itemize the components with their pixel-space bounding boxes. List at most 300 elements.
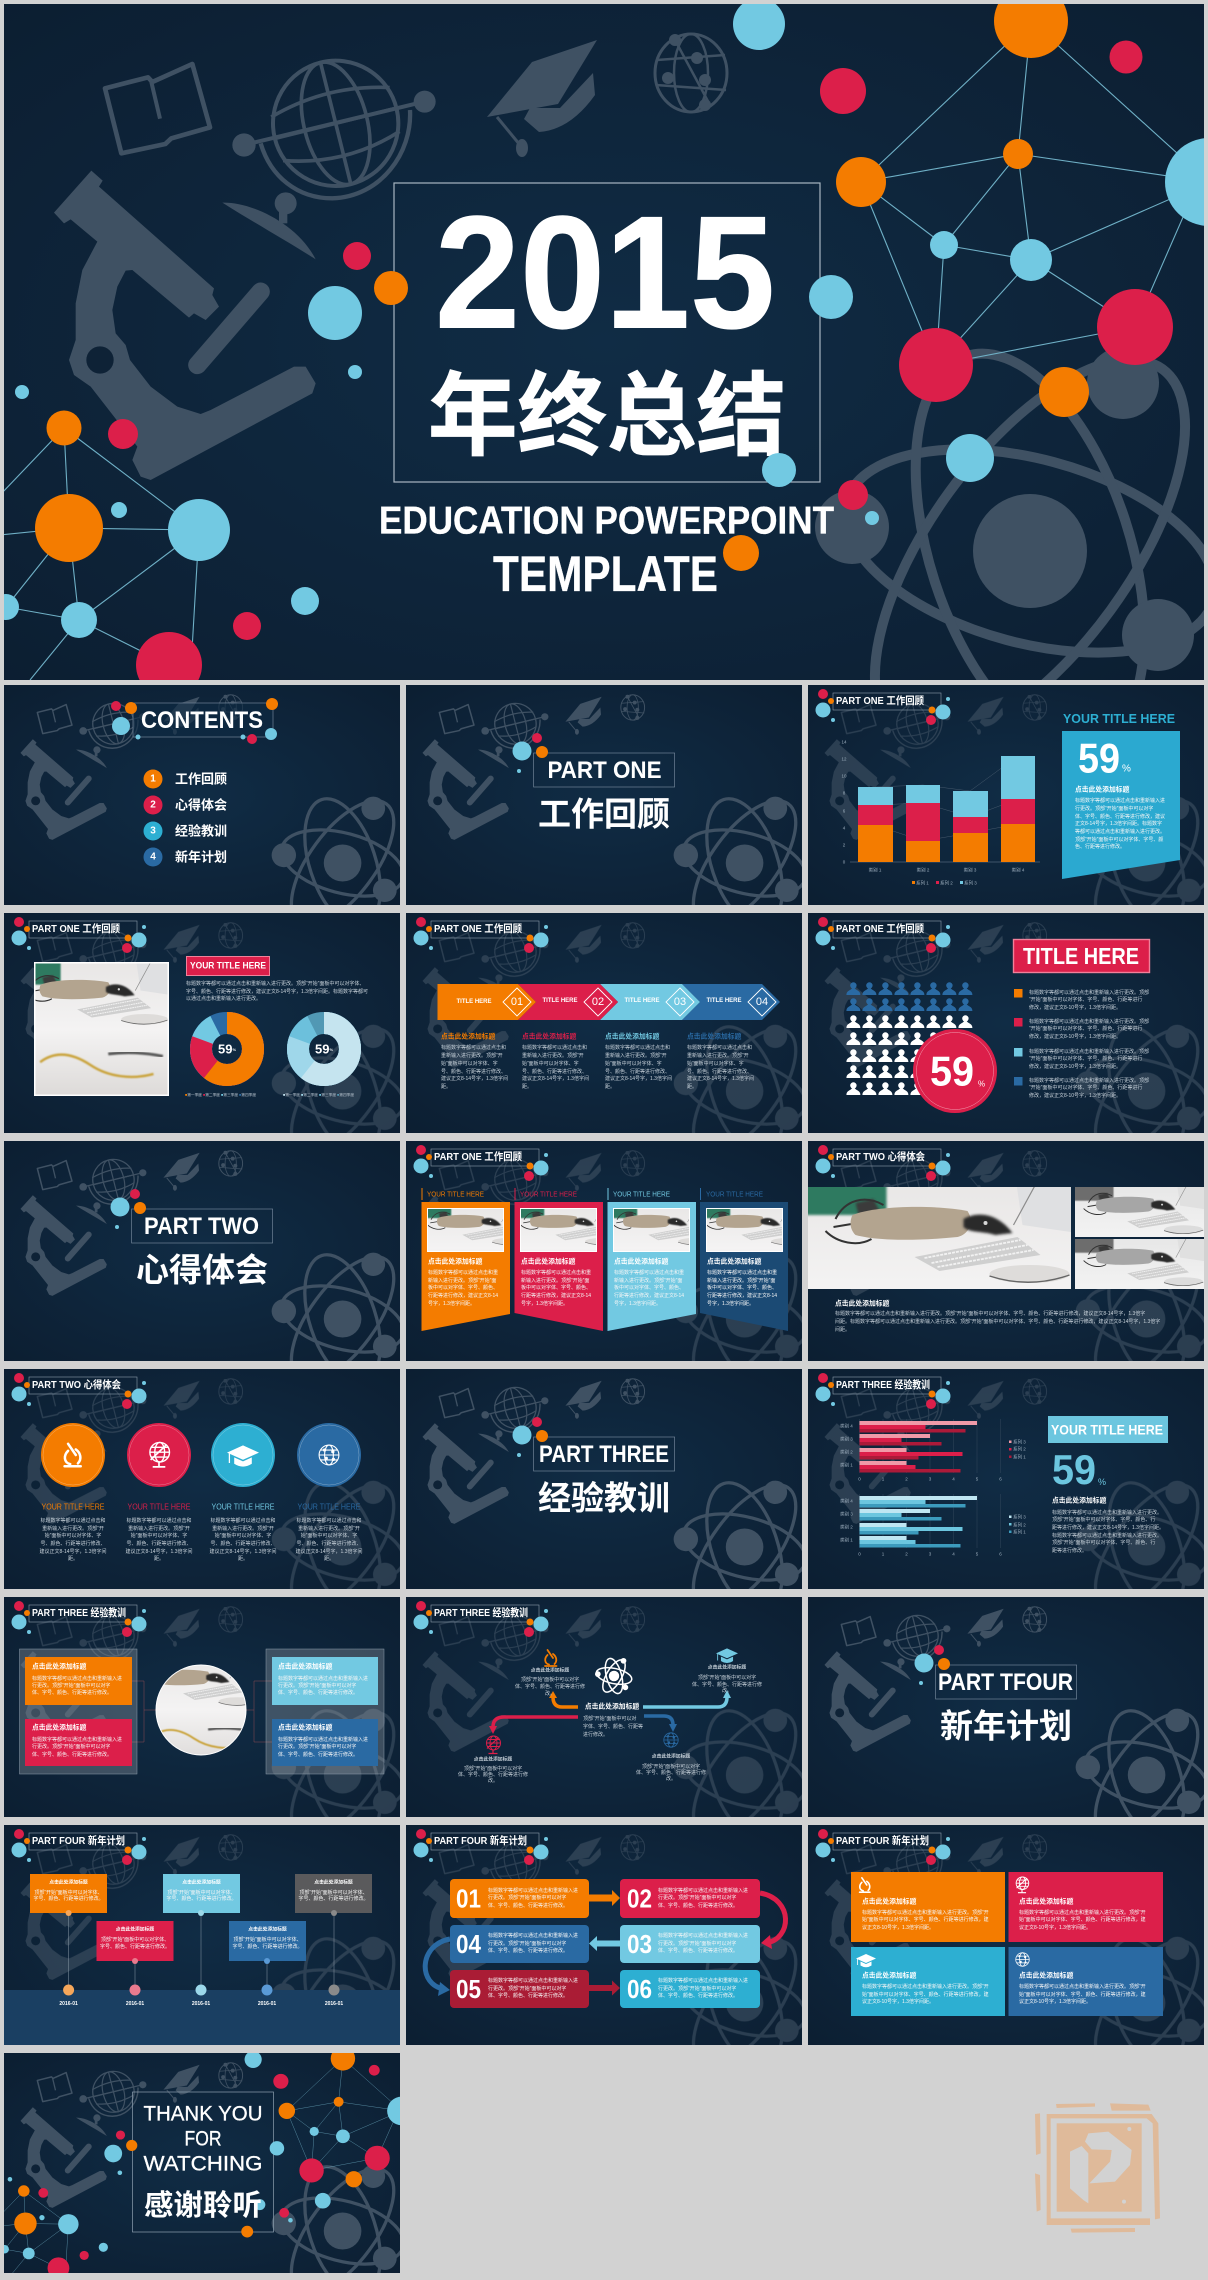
right title: YOUR TITLE HERE: [1063, 712, 1175, 726]
right panel: 标题数字等都可以通过点击和重新输入进: [278, 1736, 368, 1743]
item 2: 号、颜色、行距等进行修改、: [126, 1540, 192, 1547]
slide: cover: [4, 4, 1204, 680]
item 2: 标题数字等都可以通过点击和: [126, 1517, 192, 1524]
stacked bar chart: 2: [843, 842, 846, 848]
side text: 顶部“开始”面板中可以对字体、字号、颜色、行: [1052, 1539, 1155, 1546]
header text: PART THREE 经验教训: [836, 1378, 930, 1391]
background icons: [824, 695, 1208, 941]
card 4: YOUR TITLE HERE: [706, 1190, 763, 1198]
step 06: 体、字号、颜色、行距等进行修改。: [658, 1992, 738, 1999]
connector lines: [132, 1681, 272, 1742]
card 3: 点击此处添加标题: [614, 1256, 669, 1266]
contents list: 工作回顾: [175, 772, 227, 786]
header badge: [12, 1829, 146, 1865]
column 3: 始”面板中可以对字体、字: [605, 1060, 662, 1067]
card 2: 标题数字等都可以通过点击和重: [521, 1269, 591, 1276]
title box: [1048, 1416, 1168, 1443]
caption: 间距。标题数字等都可以通过点击和重新输入进行更改。顶部“开始”面板中可以对字体、字号、颜色、行距等进行修改，建议正文8-14号字，1.3倍字: [835, 1318, 1160, 1325]
side text: [1052, 1496, 1164, 1554]
left panel: 体、字号、颜色、行距等进行修改。: [32, 1751, 112, 1758]
item 4: YOUR TITLE HERE: [298, 1502, 360, 1512]
bullet list: “开始”面板中可以对字体、字号、颜色、行距等进行: [1029, 1055, 1142, 1062]
center text: 顶部“开始”面板中可以对: [583, 1715, 636, 1722]
item 4: 距。: [324, 1556, 334, 1562]
branch: light blue: 点击此处添加标题: [708, 1664, 746, 1670]
left panel: [20, 1649, 137, 1774]
timeline band: [4, 1990, 400, 2045]
branch: orange: 体、字号、颜色、行距等进行修: [515, 1683, 585, 1690]
step 01: 体、字号、颜色、行距等进行修改。: [488, 1902, 568, 1909]
item 1: 始”面板中可以对字体、字: [45, 1532, 101, 1539]
body text: 字号、颜色、行距等进行修改，建议正文8-14号字，1.3倍字间距。标题数字等都可: [186, 988, 368, 995]
item 3: 距。: [238, 1556, 248, 1562]
red bar chart: 3: [929, 1476, 932, 1482]
header text: PART ONE 工作回顾: [836, 922, 924, 935]
tile 2: [1008, 1872, 1163, 1942]
title box: TITLE HERE: [1023, 943, 1139, 969]
section title: PART TWO: [144, 1213, 259, 1240]
red bar chart: 类别 4: [840, 1422, 853, 1430]
card 1: 标题数字等都可以通过点击和重: [428, 1269, 498, 1276]
blue bar chart: 类别 4: [840, 1498, 853, 1504]
section frame and dots: [914, 1645, 1077, 1699]
card 3: 板中可以对字体、字号、颜色、: [614, 1284, 684, 1291]
column 1: 始”面板中可以对字体、字: [441, 1060, 498, 1067]
column 3: [605, 1032, 672, 1090]
contents list: 3: [150, 826, 156, 836]
column 4: 标题数字等都可以通过点击和: [687, 1044, 752, 1051]
card 4: 点击此处添加标题: [707, 1256, 762, 1266]
right panel: 行更改。顶部“开始”面板中可以对字: [278, 1743, 356, 1750]
item 3: 号、颜色、行距等进行修改、: [210, 1540, 276, 1547]
branch: red: 改。: [488, 1777, 498, 1784]
milestone 1: [30, 1874, 107, 2007]
tile 4: 议正文8-10号字，1.3倍字间距。: [1019, 1998, 1091, 2005]
step 05: 行更改。顶部“开始”面板中可以对字: [488, 1985, 566, 1992]
stacked bar chart: 系列 3: [964, 880, 977, 886]
right panel: 标题数字等都可以通过点击和重新输入进: [278, 1675, 368, 1682]
column 3: 重新输入进行更改。顶部“开: [605, 1052, 667, 1059]
59 percent circle: %: [978, 1080, 985, 1088]
slide: part four section: [808, 1597, 1204, 1817]
step 06: 06: [627, 1974, 652, 2004]
tile 4: 始”面板中可以对字体、字号、颜色、行距等进行修改，建: [1019, 1991, 1146, 1998]
milestone 4: 顶部“开始”面板中可以对字体、: [233, 1936, 302, 1943]
card 4: 板中可以对字体、字号、颜色、: [707, 1284, 777, 1291]
item 2: 重新输入进行更改。顶部“开: [128, 1525, 190, 1532]
side text: 顶部“开始”面板中可以对字体、字号、颜色、行: [1052, 1516, 1155, 1523]
callout panel: 标题数字等都可以通过点击和重新输入进: [1075, 797, 1165, 804]
chevron row: 04: [756, 996, 768, 1008]
step 03: 体、字号、颜色、行距等进行修改。: [658, 1947, 738, 1954]
item 2: 距。: [154, 1556, 164, 1562]
stacked bar chart: 系列 1: [916, 880, 929, 886]
body text: [186, 980, 368, 1002]
card 1: 点击此处添加标题: [428, 1256, 483, 1266]
59 percent circle: 59: [930, 1048, 974, 1094]
item 4: 重新输入进行更改。顶部“开: [298, 1525, 360, 1532]
header badge: [414, 1829, 548, 1865]
step 06: [620, 1970, 760, 2008]
branch: orange: 改。: [545, 1690, 555, 1697]
background icons: [20, 695, 413, 941]
item 3: [210, 1423, 276, 1562]
red bar chart: [840, 1419, 1026, 1482]
thank you text: [144, 2102, 262, 2222]
card 2: 新输入进行更改。顶部“开始”面: [521, 1277, 589, 1284]
right panel: 点击此处添加标题: [278, 1662, 333, 1670]
small photo top: [1060, 1172, 1208, 1305]
branch: blue: 点击此处添加标题: [652, 1752, 690, 1760]
branch: red: 体、字号、颜色、行距等进行修: [458, 1771, 528, 1778]
item 2: YOUR TITLE HERE: [128, 1502, 190, 1512]
stacked bar chart: 6: [843, 808, 846, 814]
background icons: [20, 1835, 413, 2081]
timeline connectors: [69, 1913, 334, 1990]
branch: red: [458, 1736, 528, 1784]
milestone 3: 顶部“开始”面板中可以对字体、: [167, 1889, 236, 1896]
callout panel: 行更改。顶部“开始”面板中可以对字: [1075, 805, 1153, 812]
header text: PART ONE 工作回顾: [434, 1150, 522, 1163]
stacked bar chart: 0: [843, 860, 846, 864]
red bar chart: 1: [882, 1476, 885, 1482]
contents list: [144, 770, 227, 866]
section frame and dots: [110, 1189, 273, 1243]
background icons: [824, 1379, 1208, 1625]
header badge: [816, 917, 950, 953]
blue bar chart: 4: [952, 1552, 955, 1556]
tile 3: 标题数字等都可以通过点击和重新输入进行更改。顶部“开: [862, 1983, 989, 1990]
contents list: 新年计划: [175, 850, 227, 864]
slide: thank you: [4, 2053, 400, 2273]
column 2: 号、颜色、行距等进行修改、: [522, 1068, 587, 1075]
red bar chart: 类别 1: [840, 1462, 853, 1468]
item 3: 重新输入进行更改。顶部“开: [212, 1525, 274, 1532]
watermark stamp: [1035, 2103, 1160, 2233]
item 2: 建议正文8-14号字，1.3倍字间: [126, 1548, 192, 1555]
red bar chart: 2: [905, 1476, 908, 1482]
title pill: YOUR TITLE HERE: [190, 960, 266, 972]
column 2: [522, 1032, 589, 1090]
red bar chart: 6: [999, 1476, 1002, 1482]
header text: PART THREE 经验教训: [32, 1606, 126, 1619]
left panel: 点击此处添加标题: [32, 1722, 87, 1732]
blue bar chart: 类别 1: [840, 1536, 853, 1544]
bullet list: 修改，建议正文8-10号字，1.3倍字间距。: [1029, 1092, 1121, 1099]
card 1: YOUR TITLE HERE: [427, 1190, 484, 1198]
column 2: 距。: [522, 1084, 532, 1090]
big percentage: 59: [1052, 1446, 1096, 1493]
slide: contents: [4, 685, 400, 905]
milestone 2: 点击此处添加标题: [116, 1926, 154, 1932]
tile 2: 标题数字等都可以通过点击和重新输入进行更改。顶部“开: [1019, 1909, 1146, 1916]
chevron row: 02: [592, 996, 604, 1008]
large photo: [808, 1187, 1071, 1289]
column 2: 重新输入进行更改。顶部“开: [522, 1052, 584, 1059]
right panel: 点击此处添加标题: [278, 1722, 333, 1732]
red bar chart: 5: [976, 1476, 979, 1482]
red bar chart: 类别 2: [840, 1448, 853, 1456]
column 4: 号、颜色、行距等进行修改、: [687, 1068, 752, 1075]
chevron row: TITLE HERE: [706, 998, 742, 1004]
stacked bar chart: 10: [841, 774, 847, 778]
stacked bar chart: [841, 740, 1040, 886]
side text: 距等进行修改，建议正文8-14号字，1.3倍字间距。: [1052, 1524, 1164, 1531]
blue bar chart: 0: [858, 1552, 861, 1556]
slide: part three section: [406, 1369, 802, 1589]
red bar chart: 系列 3: [1013, 1438, 1026, 1446]
milestone 5: 2016-01: [325, 2001, 343, 2007]
center text: 字体、字号、颜色、行距等: [583, 1723, 643, 1730]
left panel: 标题数字等都可以通过点击和重新输入进: [32, 1736, 122, 1743]
item 4: 标题数字等都可以通过点击和: [296, 1517, 362, 1524]
chevron row: TITLE HERE: [624, 998, 660, 1004]
section title: PART TFOUR: [938, 1669, 1073, 1696]
contents heading: [111, 698, 278, 744]
step 02: 02: [627, 1884, 652, 1914]
tile 1: 议正文8-10号字，1.3倍字间距。: [862, 1924, 934, 1931]
item 4: 始”面板中可以对字体、字: [301, 1532, 357, 1539]
milestone 3: 2016-01: [192, 2001, 210, 2007]
column 3: 标题数字等都可以通过点击和: [605, 1044, 670, 1051]
bullet list: 标题数字等都可以通过点击和重新输入进行更改。顶部: [1029, 1048, 1149, 1055]
branch: red: 点击此处添加标题: [474, 1756, 512, 1762]
milestone 1: 顶部“开始”面板中可以对字体、: [34, 1889, 103, 1896]
column 1: 建议正文8-14号字，1.3倍字间: [441, 1075, 508, 1082]
stacked bar chart: 类别 4: [1012, 866, 1025, 874]
thank you text: 感谢聆听: [144, 2189, 262, 2222]
contents list: 2: [150, 800, 156, 810]
chevron row: [438, 984, 780, 1020]
right panel: 行更改。顶部“开始”面板中可以对字: [278, 1682, 356, 1689]
background icons: [422, 1835, 815, 2081]
bullet list: 标题数字等都可以通过点击和重新输入进行更改。顶部: [1029, 1077, 1149, 1084]
header badge: [816, 1373, 950, 1409]
tile 3: 始”面板中可以对字体、字号、颜色、行距等进行修改，建: [862, 1991, 989, 1998]
card 1: 号字，1.3倍字间距。: [428, 1300, 475, 1307]
right panel: 体、字号、颜色、行距等进行修改。: [278, 1689, 358, 1696]
arrow: 03 to 04: [589, 1936, 620, 1951]
step 04: 标题数字等都可以通过点击和重新输入进: [488, 1932, 578, 1939]
side text: 标题数字等都可以通过点击和重新输入进行更改。: [1052, 1509, 1162, 1516]
item 2: [126, 1423, 192, 1562]
card 3: [594, 1188, 725, 1331]
column 2: 始”面板中可以对字体、字: [522, 1060, 579, 1067]
card 3: 号字，1.3倍字间距。: [614, 1300, 661, 1307]
header badge: [12, 1373, 146, 1409]
card 3: YOUR TITLE HERE: [613, 1190, 670, 1198]
header badge: [414, 917, 548, 953]
item 1: 号、颜色、行距等进行修改、: [40, 1540, 106, 1547]
step 03: [620, 1925, 760, 1963]
step 03: 行更改。顶部“开始”面板中可以对字: [658, 1940, 736, 1947]
red bar chart: 类别 3: [840, 1436, 853, 1442]
photo: [0, 951, 190, 1109]
blue bar chart: 类别 3: [840, 1510, 853, 1518]
blue bar chart: 6: [999, 1552, 1002, 1556]
step 05: 体、字号、颜色、行距等进行修改。: [488, 1992, 568, 1999]
section chinese title: 心得体会: [136, 1252, 268, 1288]
header text: PART FOUR 新年计划: [32, 1834, 125, 1847]
blue bar chart: 系列 3: [1013, 1514, 1026, 1520]
caption: 标题数字等都可以通过点击和重新输入进行更改。顶部“开始”面板中可以对字体、字号、颜色、行距等进行修改，建议正文8-14号字，1.3倍字: [835, 1310, 1145, 1317]
header badge: [816, 1145, 950, 1181]
step 06: 行更改。顶部“开始”面板中可以对字: [658, 1985, 736, 1992]
side text: 点击此处添加标题: [1052, 1496, 1107, 1504]
chevron row: TITLE HERE: [542, 998, 578, 1004]
milestone 2: 字号、颜色、行距等进行修改。: [100, 1943, 170, 1950]
header text: PART THREE 经验教训: [434, 1606, 528, 1619]
milestone 1: 字号、颜色、行距等进行修改。: [33, 1895, 104, 1902]
milestone 2: 顶部“开始”面板中可以对字体、: [101, 1936, 169, 1943]
section frame and dots: [512, 1417, 675, 1471]
milestone 4: 2016-01: [258, 2001, 276, 2007]
card 4: 新输入进行更改。顶部“开始”面: [707, 1277, 775, 1284]
center text: 点击此处添加标题: [585, 1702, 639, 1710]
tile 1: [851, 1872, 1005, 1942]
item 4: 号、颜色、行距等进行修改、: [296, 1540, 362, 1547]
card 2: 号字，1.3倍字间距。: [521, 1300, 568, 1307]
center text: 进行修改。: [583, 1731, 608, 1738]
red bar chart: 0: [858, 1476, 861, 1482]
header text: PART ONE 工作回顾: [836, 694, 924, 707]
stacked bar chart: 类别 3: [964, 866, 977, 874]
molecule network dots: [0, 0, 1208, 698]
background icons: [422, 1607, 815, 1853]
tile 1: 始”面板中可以对字体、字号、颜色、行距等进行修改，建: [862, 1916, 989, 1923]
milestone 1: 2016-01: [59, 2001, 78, 2007]
big percentage: %: [1098, 1477, 1106, 1487]
slide: numbered flow: [8, 1825, 802, 2273]
column 3: 建议正文8-14号字，1.3倍字间: [605, 1075, 672, 1082]
header badge: [816, 1829, 950, 1865]
step 03: 标题数字等都可以通过点击和重新输入进: [658, 1932, 748, 1939]
bullet list: “开始”面板中可以对字体、字号、颜色、行距等进行: [1029, 1025, 1142, 1032]
item 3: YOUR TITLE HERE: [212, 1502, 274, 1512]
background education icons: [54, 34, 1208, 792]
slide: part one section: [406, 685, 802, 905]
side text: 标题数字等都可以通过点击和重新输入进行更改。: [1052, 1532, 1162, 1539]
background icons: [422, 1151, 815, 1397]
callout panel: [1062, 731, 1180, 879]
arrow: 02 to 03 curve: [760, 1893, 786, 1949]
tile 3: [851, 1947, 1005, 2016]
title chinese: 年终总结: [428, 366, 786, 468]
bullet list: 修改，建议正文8-10号字，1.3倍字间距。: [1029, 1033, 1121, 1040]
tile 2: 始”面板中可以对字体、字号、颜色、行距等进行修改，建: [1019, 1916, 1146, 1923]
column 3: 号、颜色、行距等进行修改、: [605, 1068, 670, 1075]
column 2: 标题数字等都可以通过点击和: [522, 1044, 587, 1051]
tile 4: [1008, 1947, 1163, 2016]
contents list: 心得体会: [175, 798, 227, 812]
item 3: 标题数字等都可以通过点击和: [210, 1517, 276, 1524]
stacked bar chart: 4: [843, 826, 846, 830]
bullet list: 标题数字等都可以通过点击和重新输入进行更改。顶部: [1029, 989, 1149, 996]
step 04: 04: [456, 1929, 481, 1959]
header badge: [414, 1145, 548, 1181]
callout panel: 体、字号、颜色、行距等进行修改，建议: [1075, 813, 1165, 820]
blue bar chart: 系列 1: [1013, 1528, 1026, 1536]
branch: blue: 体、字号、颜色、行距等进行修: [636, 1769, 706, 1776]
column 4: 重新输入进行更改。顶部“开: [687, 1052, 749, 1059]
left panel: 行更改。顶部“开始”面板中可以对字: [32, 1682, 110, 1689]
card 1: 新输入进行更改。顶部“开始”面: [428, 1277, 496, 1284]
donut chart 1: ■第一季度 ■第二季度 ■第三季度 ■第四季度: [185, 1092, 256, 1097]
milestone 3: 点击此处添加标题: [182, 1878, 221, 1886]
milestone 5: 字号、颜色、行距等进行修改。: [298, 1895, 369, 1902]
column 4: 点击此处添加标题: [687, 1032, 742, 1040]
column 2: 建议正文8-14号字，1.3倍字间: [522, 1075, 589, 1082]
chevron row: TITLE HERE: [456, 999, 492, 1005]
step 04: 体、字号、颜色、行距等进行修改。: [488, 1947, 568, 1954]
column 1: 点击此处添加标题: [441, 1032, 496, 1040]
branch: light blue: 体、字号、颜色、行距等进行修: [692, 1681, 762, 1688]
stacked bar chart: 系列 2: [940, 880, 953, 886]
bullet list: 修改，建议正文8-10号字，1.3倍字间距。: [1029, 1004, 1121, 1011]
step 03: 03: [627, 1929, 652, 1959]
small photo bottom: [1060, 1224, 1208, 1357]
callout panel: 点击此处添加标题: [1075, 784, 1130, 794]
contents list: 经验教训: [175, 824, 227, 838]
card 1: 板中可以对字体、字号、颜色、: [428, 1284, 498, 1291]
callout panel: 59: [1078, 734, 1120, 782]
item 1: 建议正文8-14号字，1.3倍字间: [40, 1548, 106, 1555]
branch: blue: 改。: [666, 1775, 676, 1782]
card 4: 标题数字等都可以通过点击和重: [707, 1269, 777, 1276]
item 4: 建议正文8-14号字，1.3倍字间: [296, 1548, 362, 1555]
bullet list: 修改，建议正文8-10号字，1.3倍字间距。: [1029, 1063, 1121, 1070]
caption: 点击此处添加标题: [835, 1298, 890, 1308]
background icons: [824, 1835, 1208, 2081]
card 4: 行距等进行修改，建议正文8-14: [707, 1292, 777, 1299]
branch: orange: 点击此处添加标题: [531, 1666, 569, 1674]
milestone 3: [163, 1874, 240, 2007]
tile 4: 标题数字等都可以通过点击和重新输入进行更改。顶部“开: [1019, 1983, 1146, 1990]
left panel: 行更改。顶部“开始”面板中可以对字: [32, 1743, 110, 1750]
molecule network dots: [0, 2046, 416, 2279]
column 3: 距。: [605, 1084, 615, 1090]
card 4: 号字，1.3倍字间距。: [707, 1300, 754, 1307]
milestone 5: 顶部“开始”面板中可以对字体、: [299, 1889, 368, 1896]
contents list: 1: [150, 774, 156, 784]
branch: red: 顶部“开始”面板中可以对字: [464, 1765, 522, 1772]
header text: PART TWO 心得体会: [32, 1378, 121, 1391]
background icons: [20, 2063, 413, 2280]
column 1: 距。: [441, 1084, 451, 1090]
background icons: [20, 1151, 413, 1397]
card 2: 板中可以对字体、字号、颜色、: [521, 1284, 591, 1291]
card 3: 行距等进行修改，建议正文8-14: [614, 1292, 684, 1299]
item 1: [40, 1423, 106, 1562]
milestone 4: 字号、颜色、行距等进行修改。: [232, 1943, 303, 1950]
stacked bar chart: 类别 2: [917, 866, 930, 874]
item 1: YOUR TITLE HERE: [42, 1502, 104, 1512]
milestone 2: 2016-01: [126, 2001, 144, 2007]
section frame and dots: [512, 733, 675, 787]
arrow: 04 to 05 curve: [425, 1939, 450, 1996]
card 2: 行距等进行修改，建议正文8-14: [521, 1292, 591, 1299]
stacked bar chart: 类别 1: [869, 866, 882, 874]
background icons: [20, 1379, 413, 1625]
stacked bar chart: 8: [843, 790, 846, 796]
step 06: 标题数字等都可以通过点击和重新输入进: [658, 1977, 748, 1984]
column 1: [441, 1032, 508, 1090]
column 4: 建议正文8-14号字，1.3倍字间: [687, 1075, 754, 1082]
59 percent circle: [913, 1029, 997, 1113]
title box: YOUR TITLE HERE: [1051, 1422, 1163, 1438]
item 4: [296, 1423, 362, 1562]
stacked bar chart: 14: [841, 740, 847, 744]
